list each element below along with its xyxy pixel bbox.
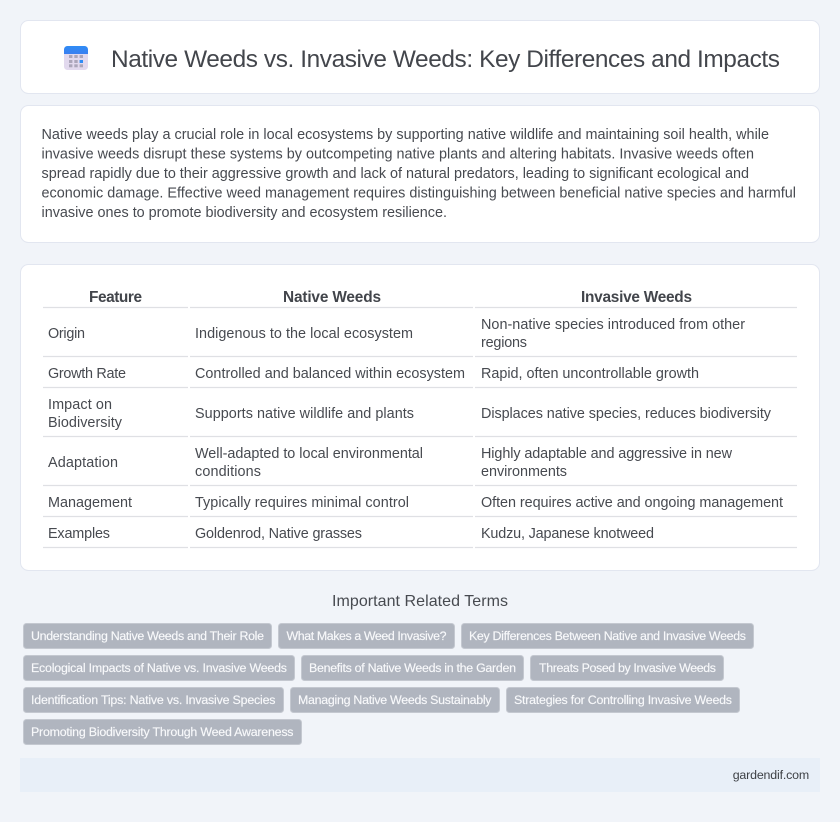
row: origin: [43, 317, 797, 356]
row: growth rate: Rapid, often uncontrollable growth: [481, 366, 699, 382]
table header row: Feature: [89, 289, 142, 306]
table header row: Native Weeds: [283, 289, 381, 306]
intro paragraph: Native weeds play a crucial role in local ecosystems by supporting native wildlife and maintaining soil health, while: [42, 127, 769, 143]
heading: important related terms: Important Related Terms: [332, 593, 508, 610]
tag: Understanding Native Weeds and Their Role: [31, 629, 264, 643]
panel: title header: [20, 20, 820, 94]
tag: Benefits of Native Weeds in the Garden: [309, 661, 516, 675]
tag: What Makes a Weed Invasive?: [286, 629, 447, 643]
row: examples: Kudzu, Japanese knotweed: [481, 526, 654, 542]
footer: [20, 758, 820, 792]
row: adaptation: [43, 446, 797, 486]
tag: [278, 624, 454, 648]
tag: Strategies for Controlling Invasive Weeds: [514, 693, 732, 707]
row: origin: Non-native species introduced from other: [481, 317, 745, 333]
row: examples: Goldenrod, Native grasses: [195, 526, 362, 542]
row: impact on biodiversity: Impact on: [48, 397, 112, 413]
tag: Ecological Impacts of Native vs. Invasive Weeds: [31, 661, 287, 675]
tag: Key Differences Between Native and Invasive Weeds: [469, 629, 746, 643]
table header row: Invasive Weeds: [581, 289, 692, 306]
row: origin: regions: [481, 335, 527, 351]
row: management: Management: [48, 495, 132, 511]
row: impact on biodiversity: Biodiversity: [48, 415, 123, 431]
tag: [24, 720, 302, 744]
tag: [24, 624, 272, 648]
icon: calendar: [64, 46, 88, 70]
tag: Managing Native Weeds Sustainably: [298, 693, 492, 707]
tag: Promoting Biodiversity Through Weed Awareness: [31, 725, 294, 739]
row: management: [43, 495, 797, 516]
row: impact on biodiversity: [43, 397, 797, 436]
panel: introduction: [20, 106, 820, 242]
row: growth rate: [43, 366, 797, 388]
tag: [506, 688, 740, 712]
row: origin: Indigenous to the local ecosystem: [195, 326, 413, 342]
intro paragraph: economic damage. Effective weed management requires distinguishing between beneficial native species and harmful: [42, 186, 796, 202]
panel: related term tags: [24, 624, 754, 744]
row: adaptation: Highly adaptable and aggressive in new: [481, 446, 733, 462]
title: Native Weeds vs. Invasive Weeds: Key Differences and Impacts: [111, 46, 780, 73]
row: growth rate: Controlled and balanced within ecosystem: [195, 366, 465, 382]
row: examples: Examples: [48, 526, 110, 542]
row: management: Often requires active and ongoing management: [481, 495, 783, 511]
tag: [24, 688, 284, 712]
row: examples: [43, 526, 797, 548]
row: management: Typically requires minimal control: [195, 495, 409, 511]
row: impact on biodiversity: Supports native wildlife and plants: [195, 406, 414, 422]
table header row: [43, 289, 797, 308]
intro paragraph: invasive ones to promote biodiversity and ecosystem resilience.: [42, 205, 447, 221]
tag: [462, 624, 754, 648]
intro paragraph: spread rapidly due to their aggressive growth and lack of natural predators, leading to significant ecological and: [42, 166, 749, 182]
tag: Threats Posed by Invasive Weeds: [539, 661, 716, 675]
tag: [24, 656, 294, 680]
tag: Identification Tips: Native vs. Invasive Species: [31, 693, 276, 707]
intro paragraph: [42, 127, 796, 221]
row: origin: Origin: [48, 326, 85, 342]
footer: gardendif.com: [733, 768, 809, 782]
row: adaptation: environments: [481, 464, 567, 480]
tag: [530, 656, 724, 680]
row: impact on biodiversity: Displaces native species, reduces biodiversity: [481, 406, 772, 422]
panel: comparison table: [20, 264, 820, 570]
intro paragraph: invasive weeds disrupt these systems by outcompeting native plants and altering habitats. Invasive weeds often: [42, 146, 754, 162]
row: adaptation: Adaptation: [48, 455, 118, 471]
tag: [302, 656, 524, 680]
row: adaptation: conditions: [195, 464, 261, 480]
row: adaptation: Well-adapted to local environmental: [195, 446, 423, 462]
tag: [290, 688, 500, 712]
row: growth rate: Growth Rate: [48, 366, 126, 382]
